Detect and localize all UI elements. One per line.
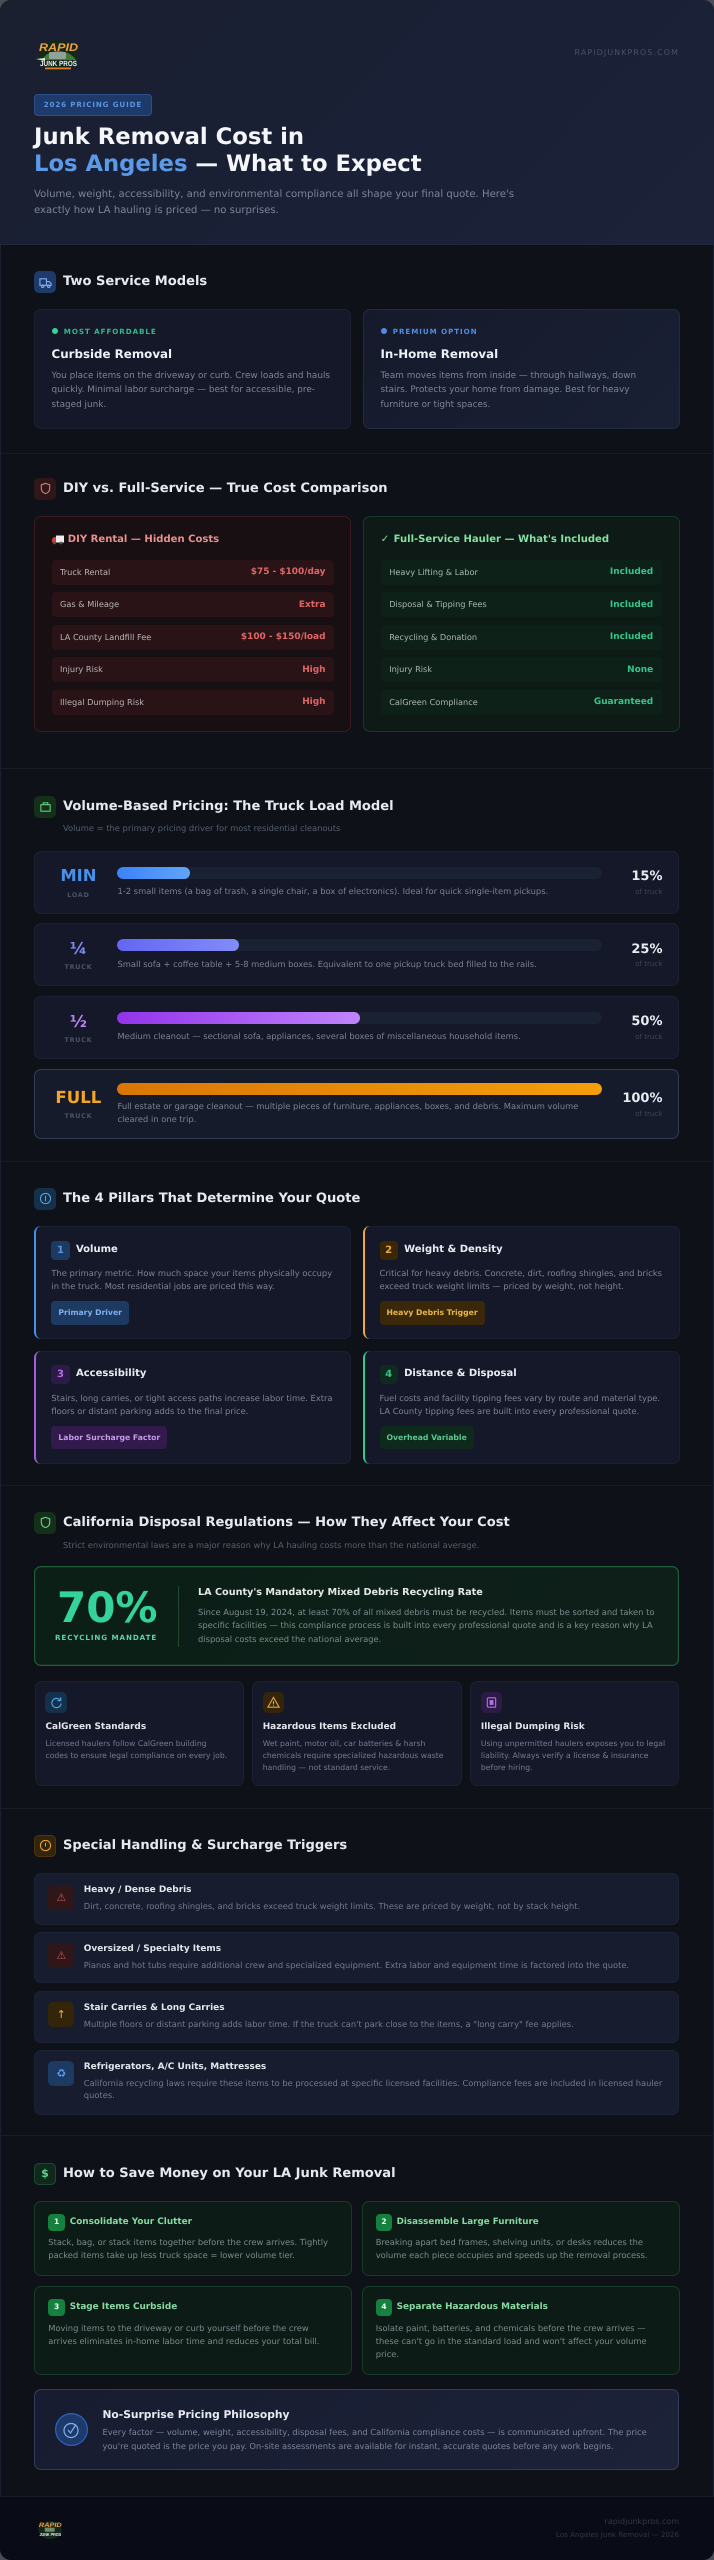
tier unit: TRUCK xyxy=(65,963,92,971)
number: 2 xyxy=(381,2217,387,2226)
row: Heavy Lifting & Labor xyxy=(389,567,478,577)
subheading: Strict environmental laws are a major reason why LA hauling costs more than the national average. xyxy=(63,1540,479,1550)
body: Using unpermitted haulers exposes you to legal xyxy=(481,1739,665,1748)
panel: DIY costs xyxy=(34,516,351,732)
title: Los Angeles — What to Expect xyxy=(34,151,422,177)
number: 1 xyxy=(57,1245,64,1256)
item body: Dirt, concrete, roofing shingles, and bricks exceed truck weight limits. These are priced by weight, not by stack height. xyxy=(84,1901,580,1911)
row: High xyxy=(302,665,326,675)
logo xyxy=(36,40,78,72)
body: Team moves items from inside — through hallways, down xyxy=(380,371,636,381)
panel: illegal dumping xyxy=(470,1681,679,1786)
item body: Multiple floors or distant parking adds labor time. If the truck can't park close to the items, a "long carry" fee applies. xyxy=(84,2019,574,2029)
row: CalGreen Compliance xyxy=(389,697,478,707)
number xyxy=(51,1365,70,1384)
body xyxy=(51,1393,333,1416)
icon: recycle: ♻ xyxy=(56,2067,66,2080)
row: High xyxy=(302,697,326,707)
row: Recycling & Donation xyxy=(389,632,477,642)
percent unit: of truck xyxy=(635,1032,662,1041)
icon: truck emoji xyxy=(52,536,64,544)
tip title: Separate Hazardous Materials xyxy=(397,2302,548,2312)
percent: 25% xyxy=(631,942,662,957)
percent unit: of truck xyxy=(635,1109,662,1118)
pillar title: Distance & Disposal xyxy=(404,1368,517,1379)
section: California regulations xyxy=(0,1485,714,1809)
row: $100 - $150/load xyxy=(241,632,326,642)
icon: clock xyxy=(34,1834,56,1856)
number: 4 xyxy=(385,1369,392,1380)
footer url: rapidjunkpros.com xyxy=(605,2517,679,2526)
body: Stairs, long carries, or tight access paths increase labor time. Extra xyxy=(51,1393,333,1403)
section: volume pricing xyxy=(0,768,714,1162)
row xyxy=(52,560,334,585)
tip body: Moving items to the driveway or curb yourself before the crew xyxy=(48,2323,309,2333)
number: 3 xyxy=(54,2302,59,2311)
tag xyxy=(380,1301,485,1325)
number: 2 xyxy=(385,1245,392,1256)
item body: California recycling laws require these items to be processed at specific licensed facilities. Compliance fees are included in licensed hauler xyxy=(84,2078,662,2088)
mandate body: disposal costs exceed the national average. xyxy=(198,1634,381,1644)
panel: recycling mandate xyxy=(34,1566,679,1666)
panel: stair carries xyxy=(34,1990,679,2042)
footer xyxy=(0,2496,714,2560)
panel: tip 1 xyxy=(34,2201,352,2276)
card title: CalGreen Standards xyxy=(45,1722,146,1732)
description: cleared in one trip. xyxy=(117,1114,196,1124)
panel: refrigerators xyxy=(34,2050,679,2114)
row xyxy=(52,690,334,715)
callout body xyxy=(102,2427,647,2451)
body: chemicals require specialized hazardous waste xyxy=(263,1751,444,1760)
row: Gas & Mileage xyxy=(60,599,119,609)
panel: full-service xyxy=(363,516,680,732)
tip title: Stage Items Curbside xyxy=(70,2302,177,2312)
percent: 15% xyxy=(631,869,662,884)
body xyxy=(51,1268,332,1291)
row: Included xyxy=(610,600,653,610)
big stat: 70% xyxy=(57,1583,158,1632)
callout body: you're quoted is the price you pay. On-site assessments are available for instant, accurate quotes before any work begins. xyxy=(102,2441,614,2451)
panel: half truck xyxy=(34,996,679,1059)
body: The primary metric. How much space your items physically occupy xyxy=(51,1268,332,1278)
mandate body: specific facilities — this compliance process is built into every professional quote and is a key reason why LA xyxy=(198,1620,653,1630)
body: codes to ensure legal compliance on every job. xyxy=(45,1751,227,1760)
tier label: MIN xyxy=(60,866,96,885)
body: You place items on the driveway or curb. Crew loads and hauls xyxy=(52,371,330,381)
item body: Pianos and hot tubs require additional crew and specialized equipment. Extra labor and equipment time is factored into the quote. xyxy=(84,1960,629,1970)
icon: warning: ⚠ xyxy=(56,1891,66,1904)
description: 1-2 small items (a bag of trash, a single chair, a box of electronics). Ideal for quick single-item pickups. xyxy=(117,886,548,896)
item body: quotes. xyxy=(84,2090,115,2100)
body: quickly. Minimal labor surcharge — best for accessible, pre- xyxy=(52,385,315,395)
heading: California Disposal Regulations — How They Affect Your Cost xyxy=(63,1515,510,1530)
mandate title: LA County's Mandatory Mixed Debris Recycling Rate xyxy=(198,1587,483,1598)
mandate body xyxy=(198,1607,654,1644)
row: $75 - $100/day xyxy=(251,567,326,577)
icon: warning xyxy=(48,1943,74,1968)
row: Included xyxy=(610,567,653,577)
icon: warning xyxy=(263,1692,284,1713)
subtitle: Volume, weight, accessibility, and environmental compliance all shape your final quote. Here's xyxy=(34,189,514,200)
tip body: Stack, bag, or stack items together before the crew arrives. Tightly xyxy=(48,2237,328,2247)
icon: truck xyxy=(34,271,56,293)
panel: quarter truck xyxy=(34,923,679,986)
card title: Illegal Dumping Risk xyxy=(481,1722,585,1732)
panel: hazardous xyxy=(252,1681,462,1786)
body: before hiring. xyxy=(481,1763,533,1772)
item title: Oversized / Specialty Items xyxy=(84,1944,221,1954)
body: handling — not standard service. xyxy=(263,1763,390,1772)
number: 4 xyxy=(381,2302,387,2311)
tag: Primary Driver xyxy=(58,1308,122,1317)
card title: In-Home Removal xyxy=(380,347,498,361)
icon: check circle xyxy=(55,2413,88,2446)
tag: Heavy Debris Trigger xyxy=(386,1308,478,1317)
icon: shield xyxy=(34,1512,56,1534)
footer note: Los Angeles Junk Removal — 2026 xyxy=(556,2530,679,2539)
tag xyxy=(51,1426,167,1449)
heading: Two Service Models xyxy=(63,274,207,289)
footer logo: RAPID xyxy=(38,2521,61,2528)
icon: warning xyxy=(48,1884,74,1910)
item title: Stair Carries & Long Carries xyxy=(84,2003,225,2013)
title xyxy=(32,124,422,177)
number: 1 xyxy=(54,2217,59,2226)
section: how to save money xyxy=(0,2135,714,2497)
panel: tip 3 xyxy=(34,2286,352,2375)
panel title: ✓ Full-Service Hauler — What's Included xyxy=(381,534,609,545)
body: Wet paint, motor oil, car batteries & harsh xyxy=(263,1739,425,1748)
body xyxy=(263,1739,444,1772)
subtitle: exactly how LA hauling is priced — no surprises. xyxy=(34,205,279,216)
heading: Volume-Based Pricing: The Truck Load Model xyxy=(63,799,394,814)
body: floors or distant parking adds to the final price. xyxy=(51,1406,248,1416)
panel: distance xyxy=(362,1351,680,1464)
row xyxy=(381,560,662,585)
body: stairs. Protects your home from damage. Best for heavy xyxy=(380,385,629,395)
pillar title: Volume xyxy=(76,1244,118,1255)
panel: volume xyxy=(34,1226,351,1339)
tip body: price. xyxy=(376,2349,399,2359)
header xyxy=(0,0,714,245)
card title: Hazardous Items Excluded xyxy=(263,1722,396,1732)
row xyxy=(381,592,662,617)
tip body: arrives eliminates in-home labor time and reduces your total bill. xyxy=(48,2336,319,2346)
body: exceed truck weight limits — priced by weight, not height. xyxy=(380,1281,624,1291)
body xyxy=(481,1739,665,1772)
icon: warning: ⚠ xyxy=(56,1949,66,1962)
panel: CalGreen xyxy=(35,1681,244,1786)
percent: 100% xyxy=(622,1091,662,1106)
icon: info circle xyxy=(34,1188,56,1210)
description xyxy=(117,1101,578,1124)
panel: heavy debris xyxy=(34,1872,679,1925)
number xyxy=(48,2299,65,2316)
section: surcharge triggers xyxy=(0,1808,714,2136)
body: furniture or tight spaces. xyxy=(380,400,490,410)
tier label: FULL xyxy=(55,1088,101,1107)
row: Injury Risk xyxy=(60,664,103,674)
stat label: RECYCLING MANDATE xyxy=(55,1633,157,1642)
row xyxy=(52,625,334,650)
badge: 2026 PRICING GUIDE xyxy=(44,100,142,109)
panel: full truck xyxy=(34,1069,679,1139)
row: Included xyxy=(610,632,653,642)
body: Licensed haulers follow CalGreen building xyxy=(45,1739,207,1748)
pillar title: Accessibility xyxy=(76,1368,146,1379)
row xyxy=(52,657,334,682)
label: MOST AFFORDABLE xyxy=(64,327,157,336)
tier unit: TRUCK xyxy=(65,1036,92,1044)
panel: curbside xyxy=(34,309,351,429)
panel: tip 4 xyxy=(362,2286,680,2375)
icon: square xyxy=(481,1692,502,1713)
icon: shield xyxy=(34,478,56,500)
body xyxy=(45,1739,227,1760)
body: LA County tipping fees are built into every professional quote. xyxy=(380,1406,639,1416)
tag xyxy=(380,1426,474,1449)
row xyxy=(381,690,662,715)
logo: RAPID xyxy=(39,42,78,54)
section: 4 pillars xyxy=(0,1161,714,1486)
percent unit: of truck xyxy=(635,959,662,968)
section: two service models xyxy=(34,271,680,429)
heading: Special Handling & Surcharge Triggers xyxy=(63,1838,347,1853)
label: PREMIUM OPTION xyxy=(393,327,478,336)
tier label: ¼ xyxy=(70,939,87,958)
panel: tip 2 xyxy=(362,2201,680,2276)
tip title: Disassemble Large Furniture xyxy=(397,2217,539,2227)
body: Fuel costs and facility tipping fees vary by route and material type. xyxy=(380,1393,660,1403)
progress bar xyxy=(117,867,602,879)
icon: arrow up xyxy=(48,2002,74,2027)
body xyxy=(380,1268,662,1291)
icon: arrow up: ↑ xyxy=(57,2008,66,2021)
heading: The 4 Pillars That Determine Your Quote xyxy=(63,1191,360,1206)
description: Small sofa + coffee table + 5-8 medium boxes. Equivalent to one pickup truck bed filled to the rails. xyxy=(117,959,537,969)
number: 3 xyxy=(57,1369,64,1380)
progress bar xyxy=(117,1012,602,1024)
row: None xyxy=(627,665,653,675)
item title: Refrigerators, A/C Units, Mattresses xyxy=(84,2062,266,2072)
percent: 50% xyxy=(631,1014,662,1029)
icon: refresh xyxy=(45,1692,67,1713)
badge xyxy=(34,94,152,116)
icon: recycle xyxy=(48,2061,74,2086)
number xyxy=(51,1241,70,1260)
tag: Overhead Variable xyxy=(386,1433,467,1442)
row: Illegal Dumping Risk xyxy=(60,697,144,707)
panel: in-home xyxy=(363,309,680,429)
icon: box xyxy=(34,796,56,818)
number xyxy=(380,1365,398,1384)
item title: Heavy / Dense Debris xyxy=(84,1885,192,1895)
tier label: ½ xyxy=(70,1012,87,1030)
row: Guaranteed xyxy=(594,697,653,707)
subtitle xyxy=(34,189,514,216)
tier unit: LOAD xyxy=(67,890,90,898)
description: Medium cleanout — sectional sofa, appliances, several boxes of miscellaneous household items. xyxy=(117,1031,521,1041)
number xyxy=(376,2299,392,2316)
body: liability. Always verify a license & insurance xyxy=(481,1751,649,1760)
row xyxy=(52,592,334,617)
tag xyxy=(51,1301,129,1325)
row: Truck Rental xyxy=(60,567,110,577)
pillar title: Weight & Density xyxy=(404,1244,503,1255)
icon: dollar: $ xyxy=(41,2167,49,2180)
section: DIY vs full-service xyxy=(0,452,714,768)
tip body: Breaking apart bed frames, shelving units, or desks reduces the xyxy=(376,2237,643,2247)
progress bar xyxy=(117,939,602,951)
panel: no-surprise philosophy xyxy=(34,2389,679,2470)
row: Injury Risk xyxy=(389,664,432,674)
icon: dollar xyxy=(34,2162,56,2184)
row xyxy=(381,657,662,682)
footer logo xyxy=(38,2521,62,2539)
tier unit: TRUCK xyxy=(65,1112,92,1120)
tip body: packed items take up less truck space = lower volume tier. xyxy=(48,2250,295,2260)
body xyxy=(380,1393,660,1416)
tip body xyxy=(376,2323,647,2359)
mandate body: Since August 19, 2024, at least 70% of all mixed debris must be recycled. Items must be sorted and taken to xyxy=(198,1607,654,1617)
panel: min load xyxy=(34,850,679,914)
percent unit: of truck xyxy=(635,887,662,896)
body xyxy=(52,371,330,410)
heading: DIY vs. Full-Service — True Cost Comparison xyxy=(63,481,388,496)
tip body: volume each piece occupies and speeds up the removal process. xyxy=(376,2250,647,2260)
number xyxy=(380,1241,398,1260)
item body xyxy=(84,2078,662,2100)
panel: weight xyxy=(362,1226,680,1339)
subheading: Volume = the primary pricing driver for most residential cleanouts xyxy=(63,822,340,832)
panel title: DIY Rental — Hidden Costs xyxy=(68,534,219,545)
body: in the truck. Most residential jobs are priced this way. xyxy=(51,1281,275,1291)
row: LA County Landfill Fee xyxy=(60,632,151,642)
tip body xyxy=(376,2237,647,2260)
number xyxy=(48,2214,65,2231)
body xyxy=(380,371,636,410)
website: RAPIDJUNKPROS.COM xyxy=(575,48,679,57)
progress bar xyxy=(117,1083,602,1095)
callout body: Every factor — volume, weight, accessibility, disposal fees, and California compliance costs — is communicated upfront. The price xyxy=(102,2427,647,2437)
tip body: these can't go in the standard load and won't affect your volume xyxy=(376,2336,647,2346)
card title: Curbside Removal xyxy=(52,347,172,361)
title: Junk Removal Cost in xyxy=(34,124,304,150)
panel: oversized xyxy=(34,1932,679,1983)
row: Extra xyxy=(299,600,326,610)
row: Disposal & Tipping Fees xyxy=(389,599,487,609)
tip body xyxy=(48,2237,328,2260)
tip body xyxy=(48,2323,319,2346)
tag: Labor Surcharge Factor xyxy=(58,1433,160,1442)
callout title: No-Surprise Pricing Philosophy xyxy=(102,2408,289,2421)
body: Critical for heavy debris. Concrete, dirt, roofing shingles, and bricks xyxy=(380,1268,662,1278)
description: Full estate or garage cleanout — multiple pieces of furniture, appliances, boxes, and debris. Maximum volume xyxy=(117,1101,578,1111)
number xyxy=(376,2214,392,2231)
panel: accessibility xyxy=(34,1351,351,1464)
body: staged junk. xyxy=(52,400,106,410)
tip title: Consolidate Your Clutter xyxy=(70,2217,192,2227)
row xyxy=(381,625,662,650)
tip body: Isolate paint, batteries, and chemicals before the crew arrives — xyxy=(376,2323,645,2333)
heading: How to Save Money on Your LA Junk Removal xyxy=(63,2166,396,2181)
